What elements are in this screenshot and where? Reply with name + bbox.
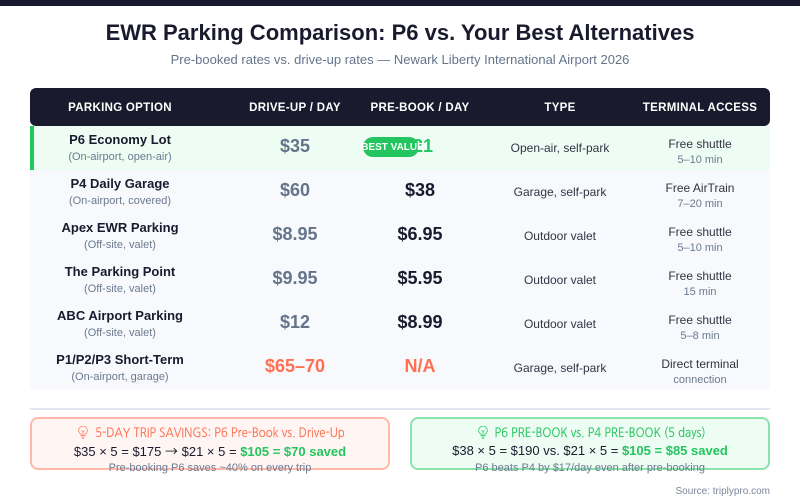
access time: 5–10 min	[677, 242, 723, 254]
pre-book price: $8.99	[397, 312, 443, 332]
note: (Off-site, valet)	[84, 239, 156, 251]
drive-up price: $9.95	[272, 268, 318, 288]
access: Free shuttle	[668, 137, 732, 151]
callout note: P6 beats P4 by $17/day even after pre-booking	[475, 462, 705, 474]
header: type: TYPE	[544, 102, 576, 114]
best value badge	[363, 137, 419, 157]
type: Outdoor valet	[524, 317, 596, 331]
name: P1/P2/P3 Short-Term	[56, 352, 184, 367]
access time: 5–8 min	[680, 330, 720, 342]
note: (On-airport, open-air)	[68, 151, 172, 163]
type: Garage, self-park	[514, 361, 606, 375]
access: Free AirTrain	[666, 181, 734, 195]
access: Free shuttle	[668, 225, 732, 239]
name: The Parking Point	[65, 264, 175, 279]
header: drive-up: DRIVE-UP / DAY	[249, 102, 341, 114]
access: Direct terminal	[661, 357, 739, 371]
icon: light bulb	[478, 426, 488, 439]
icon: light bulb	[78, 426, 88, 439]
callout note: Pre-booking P6 saves ~40% on every trip	[109, 462, 311, 474]
callout formula: $38 × 5 = $190 vs. $21 × 5 = $105 = $85 saved	[452, 443, 728, 458]
source: Source: triplypro.com	[676, 486, 770, 497]
type: Outdoor valet	[524, 229, 596, 243]
access time: 5–10 min	[677, 154, 723, 166]
name: P4 Daily Garage	[70, 176, 170, 191]
access: Free shuttle	[668, 313, 732, 327]
subtitle: Pre-booked rates vs. drive-up rates — Newark Liberty International Airport 2026	[171, 52, 629, 67]
drive-up price: $60	[280, 180, 310, 200]
name: P6 Economy Lot	[69, 132, 171, 147]
header: parking option: PARKING OPTION	[68, 102, 172, 114]
pre-book price: N/A	[404, 356, 436, 376]
name: ABC Airport Parking	[57, 308, 183, 323]
access: Free shuttle	[668, 269, 732, 283]
row: P4 Daily Garage	[30, 170, 770, 214]
drive-up price: $65–70	[265, 356, 325, 376]
pre-book price: $6.95	[397, 224, 443, 244]
type: Open-air, self-park	[511, 141, 609, 155]
note: (On-airport, covered)	[69, 195, 171, 207]
table header	[30, 88, 770, 126]
drive-up price: $35	[280, 136, 310, 156]
row: P6 Economy Lot	[30, 126, 770, 170]
access time: 7–20 min	[677, 198, 723, 210]
pre-book price: $21	[403, 136, 433, 156]
row: The Parking Point	[30, 258, 770, 302]
note: (Off-site, valet)	[84, 327, 156, 339]
table	[30, 88, 770, 386]
callout heading: P6 PRE-BOOK vs. P4 PRE-BOOK (5 days)	[494, 426, 705, 439]
note: (On-airport, garage)	[71, 371, 169, 383]
divider	[30, 408, 770, 410]
badge text: BEST VALUE	[361, 142, 424, 153]
row: P1/P2/P3 Short-Term	[30, 346, 770, 390]
callout: 5-day trip savings	[30, 417, 390, 470]
header: terminal access: TERMINAL ACCESS	[643, 102, 757, 114]
name: Apex EWR Parking	[61, 220, 179, 235]
header: pre-book: PRE-BOOK / DAY	[370, 102, 470, 114]
title: EWR Parking Comparison: P6 vs. Your Best Alternatives	[106, 20, 694, 45]
row: Apex EWR Parking	[30, 214, 770, 258]
access time: connection	[673, 374, 727, 386]
highlight bar	[30, 126, 34, 170]
row: ABC Airport Parking	[30, 302, 770, 346]
type: Garage, self-park	[514, 185, 606, 199]
type: Outdoor valet	[524, 273, 596, 287]
drive-up price: $12	[280, 312, 310, 332]
drive-up price: $8.95	[272, 224, 318, 244]
access time: 15 min	[683, 286, 717, 298]
callout formula: $35 × 5 = $175 → $21 × 5 = $105 = $70 saved	[74, 441, 346, 460]
pre-book price: $38	[405, 180, 435, 200]
callout heading: 5-DAY TRIP SAVINGS: P6 Pre-Book vs. Drive-Up	[95, 426, 345, 439]
callout: P6 vs P4	[410, 417, 770, 470]
top bar	[0, 0, 800, 6]
note: (Off-site, valet)	[84, 283, 156, 295]
pre-book price: $5.95	[397, 268, 443, 288]
